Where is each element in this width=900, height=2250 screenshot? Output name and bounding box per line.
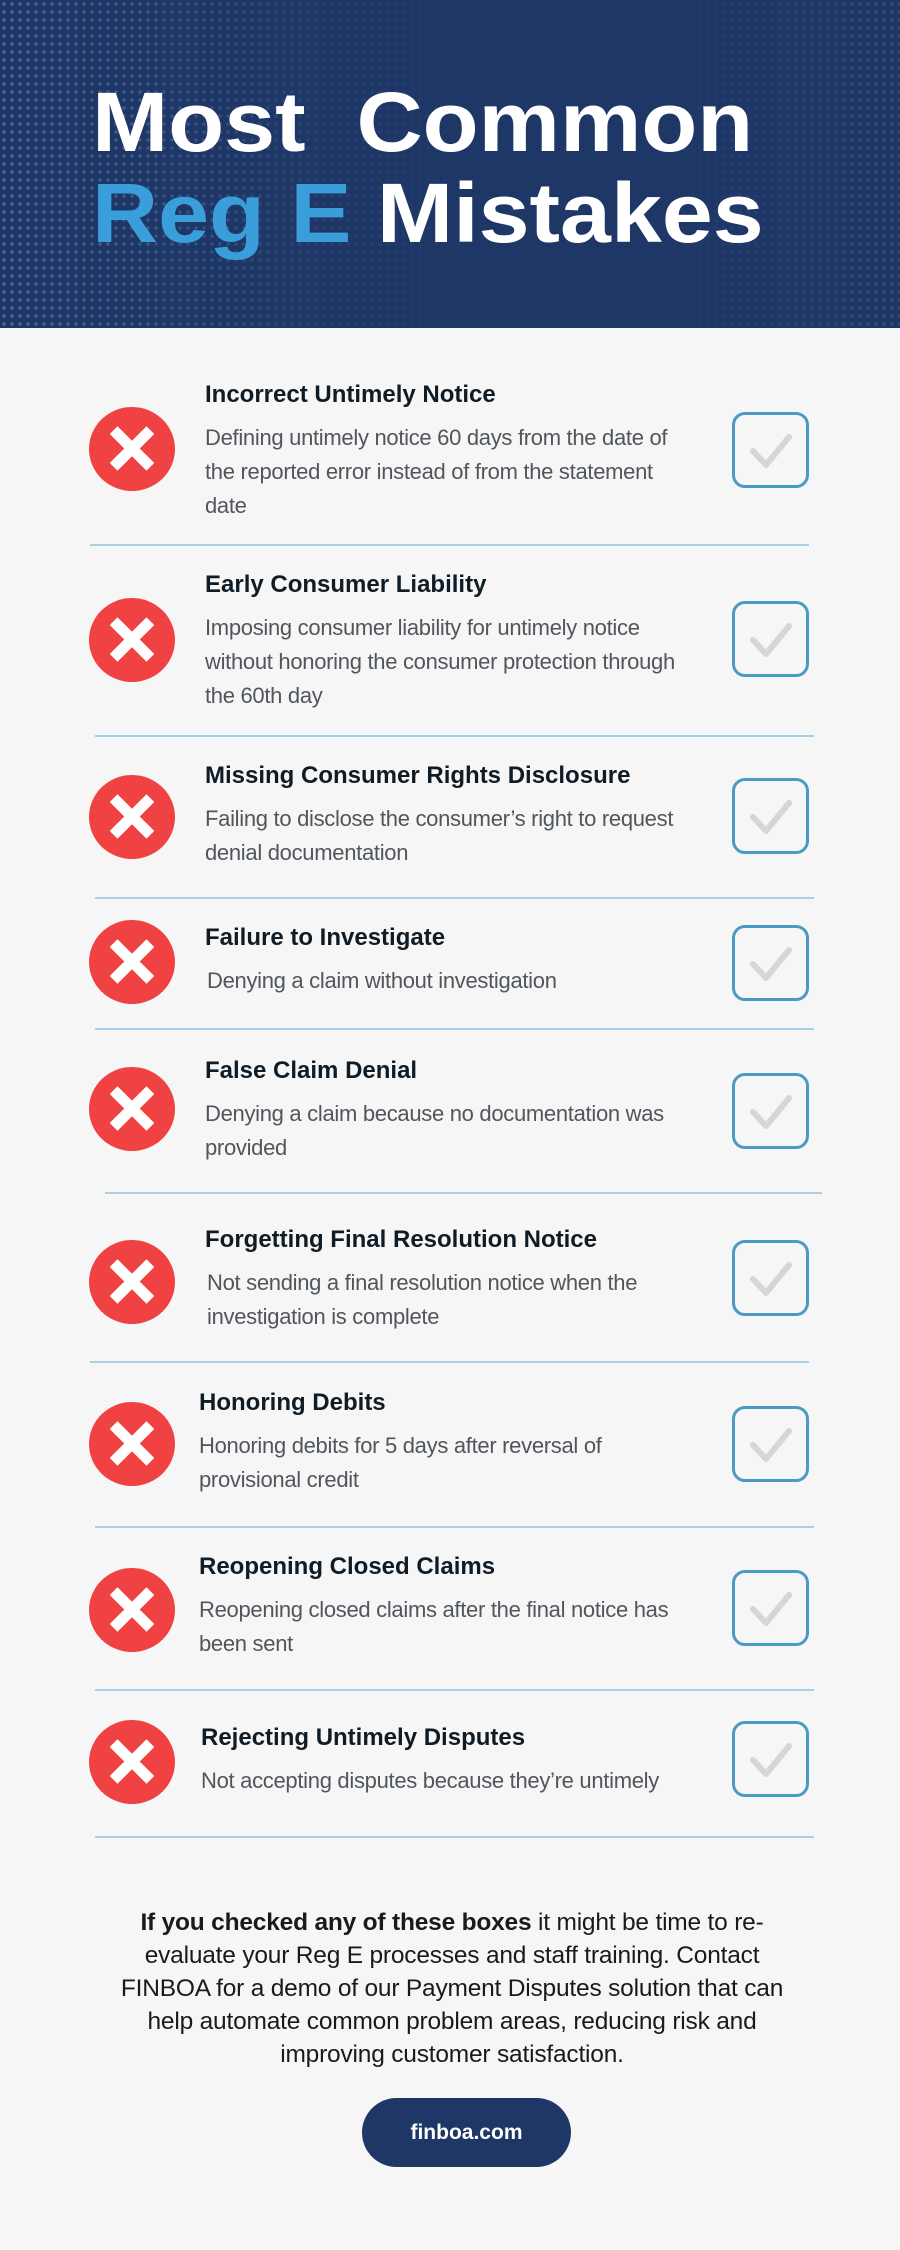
text: False Claim Denial <box>205 1057 417 1084</box>
text: Reopening closed claims after the final notice has been sent <box>199 1597 668 1656</box>
item 8 <box>89 1553 809 1656</box>
header <box>0 0 900 328</box>
text: Missing Consumer Rights Disclosure <box>205 762 630 789</box>
text: Forgetting Final Resolution Notice <box>205 1226 597 1253</box>
item 7 <box>89 1389 809 1492</box>
title line 2: Reg E Mistakes <box>92 166 764 260</box>
closing text: If you checked any of these boxes it might be time to re-evaluate your Reg E processes and staff training. Contact FINBOA for a demo of our Payment Disputes solution that can help automate common problem areas, reducing risk and improving customer satisfaction. <box>121 1909 783 2068</box>
text: Rejecting Untimely Disputes <box>201 1724 525 1751</box>
text: Imposing consumer liability for untimely notice without honoring the consumer protection through the 60th day <box>205 615 675 708</box>
text: Not accepting disputes because they’re untimely <box>201 1768 659 1793</box>
text: Early Consumer Liability <box>205 571 486 598</box>
text: Incorrect Untimely Notice <box>205 381 496 408</box>
item 9 <box>89 1720 809 1804</box>
text: Denying a claim without investigation <box>207 968 557 993</box>
item 4 <box>89 920 809 1004</box>
text: Reopening Closed Claims <box>199 1553 495 1580</box>
button: finboa.com: finboa.com <box>410 2121 522 2144</box>
title line 1: Most Common <box>92 75 753 169</box>
text: Honoring debits for 5 days after reversal of provisional credit <box>199 1433 602 1492</box>
item 3 <box>89 762 809 865</box>
text: Failing to disclose the consumer’s right to request denial documentation <box>205 806 673 865</box>
item 6 <box>89 1226 809 1329</box>
item 2 <box>89 571 809 708</box>
text: Not sending a final resolution notice when the investigation is complete <box>207 1270 637 1329</box>
text: Denying a claim because no documentation was provided <box>205 1101 664 1160</box>
text: Honoring Debits <box>199 1389 386 1416</box>
text: Failure to Investigate <box>205 924 445 951</box>
button: finboa.com <box>362 2098 571 2167</box>
text: Defining untimely notice 60 days from the date of the reported error instead of from the statement date <box>205 425 667 518</box>
item 5 <box>89 1057 809 1160</box>
item 1 <box>89 381 809 518</box>
